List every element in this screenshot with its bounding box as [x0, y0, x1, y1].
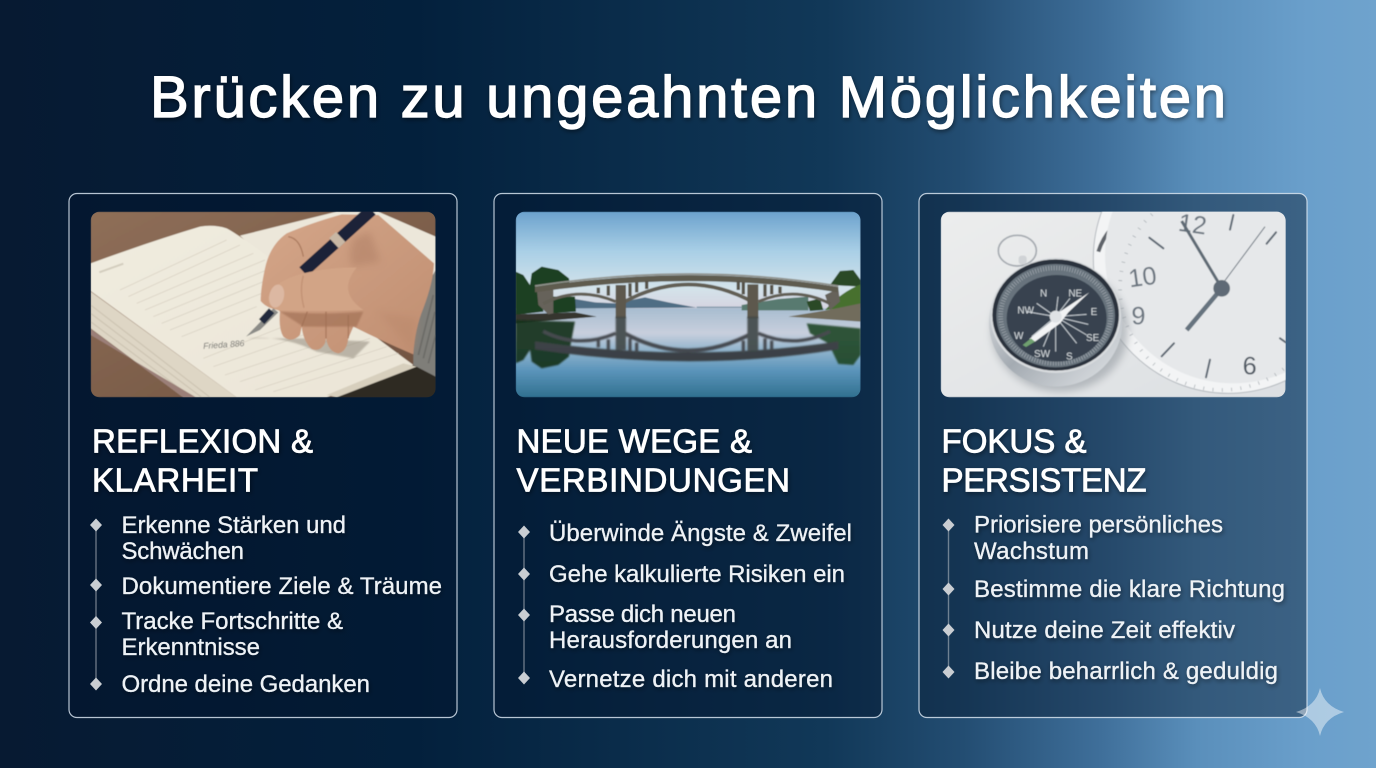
heading: KLARHEIT [92, 462, 258, 498]
image: compass and clock: E [1091, 307, 1098, 318]
image: compass and clock: SW [1034, 349, 1051, 360]
heading: VERBINDUNGEN [516, 462, 790, 498]
list: Nutze deine Zeit effektiv [974, 617, 1235, 644]
timeline bullets [90, 518, 102, 690]
heading: REFLEXION & [92, 422, 313, 460]
list: Gehe kalkulierte Risiken ein [549, 561, 845, 588]
timeline bullets [518, 526, 530, 684]
list: Priorisiere persönliches [974, 512, 1223, 538]
list: Wachstum [974, 538, 1089, 565]
list [974, 512, 1285, 685]
panel: Neue Wege & Verbindungen [494, 194, 882, 718]
image: compass and clock: 6 [1243, 352, 1257, 380]
list: Schwächen [122, 538, 244, 565]
image: compass and clock: SE [1086, 333, 1100, 344]
heading: FOKUS & [942, 422, 1086, 460]
title: Brücken zu ungeahnten Möglichkeiten [150, 65, 1226, 130]
image: compass and clock: N [1040, 289, 1047, 300]
image: compass and clock: 12 [1177, 209, 1208, 241]
list: Herausforderungen an [549, 627, 792, 654]
icon: sparkle [1296, 688, 1344, 736]
list: Vernetze dich mit anderen [549, 666, 833, 693]
list: Bestimme die klare Richtung [974, 576, 1285, 603]
image: compass and clock: S [1066, 352, 1073, 363]
timeline bullets [942, 518, 954, 678]
list: Überwinde Ängste & Zweifel [549, 520, 852, 547]
image: hand writing in notebook [91, 210, 436, 397]
list [549, 520, 852, 693]
list: Erkenntnisse [122, 634, 260, 661]
heading: NEUE WEGE & [516, 422, 752, 460]
heading: PERSISTENZ [942, 462, 1146, 498]
image: compass and clock: 9 [1131, 302, 1145, 330]
heading [92, 422, 313, 498]
list: Bleibe beharrlich & geduldig [974, 658, 1278, 685]
image: compass and clock: NE [1068, 289, 1083, 300]
image: compass and clock: NW [1017, 305, 1035, 316]
list: Dokumentiere Ziele & Träume [122, 573, 442, 600]
heading [516, 422, 790, 498]
list [122, 512, 442, 698]
list: Erkenne Stärken und [122, 512, 346, 539]
image: compass and clock [940, 212, 1286, 398]
image: hand writing in notebook: Frieda 886 [203, 338, 245, 351]
image: compass and clock: W [1014, 331, 1024, 342]
list: Ordne deine Gedanken [122, 671, 370, 698]
heading [942, 422, 1146, 498]
list: Tracke Fortschritte & [122, 608, 343, 635]
panel: Fokus & Persistenz [918, 192, 1308, 718]
panel: Reflexion & Klarheit [69, 194, 457, 718]
image: arched bridge reflected in lake [516, 212, 861, 397]
image: compass and clock: 10 [1127, 262, 1158, 293]
list: Passe dich neuen [549, 601, 736, 628]
